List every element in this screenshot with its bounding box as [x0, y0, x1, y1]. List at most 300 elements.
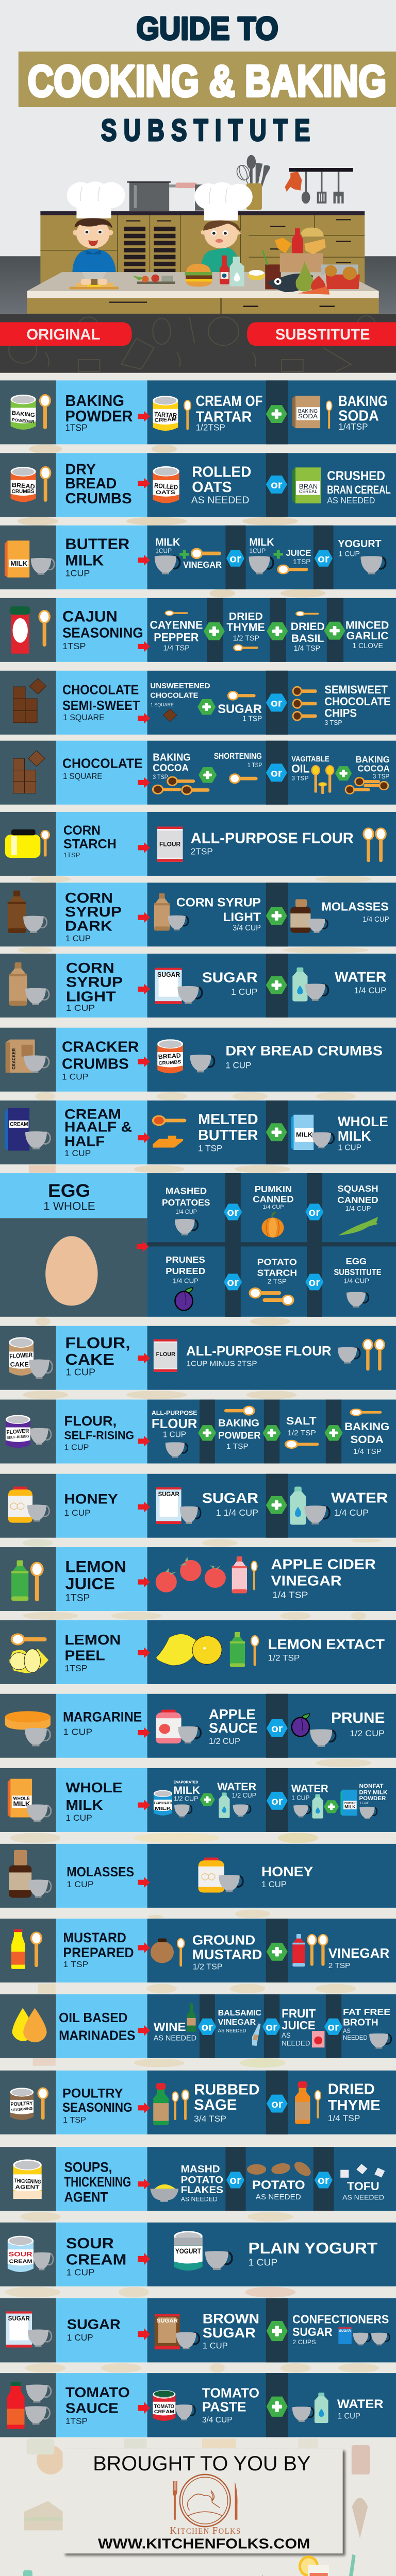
or — [305, 1204, 323, 1220]
original name: CHOCOLATE — [62, 683, 139, 698]
original icon — [10, 2087, 48, 2120]
substitute: nonfat dry milk powder: POWDER — [359, 1794, 386, 1802]
substitute: brown sugar: 1 CUP — [203, 2341, 228, 2351]
logo: kitchen folks: KITCHEN FOLKS — [170, 2526, 240, 2536]
original name: SOUPS, — [64, 2159, 112, 2175]
original name: MUSTARD — [63, 1930, 126, 1945]
substitute: rolled oats: AS NEEDED — [191, 495, 249, 506]
substitute: evaporated milk: 1/2 CUP — [174, 1795, 199, 1802]
substitute: evaporated milk: EVAPORATED — [154, 1801, 172, 1805]
substitute: brown sugar: SUGAR — [157, 2318, 178, 2324]
substitute: mashed potato flakes: AS NEEDED — [181, 2196, 218, 2203]
row: cajun seasoning — [0, 598, 396, 662]
utensil holder — [235, 155, 270, 210]
egg name — [43, 1180, 95, 1213]
arrow — [138, 2402, 150, 2414]
original name: POWDER — [65, 408, 133, 425]
original name: SYRUP — [66, 975, 123, 991]
or: or — [318, 2174, 329, 2187]
substitute: milk and juice: JUICE — [286, 548, 311, 558]
substitute: molasses: MOLASSES — [322, 901, 389, 913]
substitute: ground mustard: GROUND — [192, 1933, 255, 1947]
arrow — [138, 1132, 150, 1143]
row: lemon juice — [0, 1547, 396, 1611]
arrow — [138, 1056, 150, 1067]
substitute: all-purpose flour — [157, 826, 387, 862]
substitute: yogurt: 1 CUP — [338, 550, 360, 558]
row: molasses — [0, 1844, 396, 1908]
original name: 1 CUP — [67, 2333, 93, 2343]
row: tomato sauce — [0, 2373, 396, 2437]
or — [224, 1274, 242, 1290]
arrow — [138, 713, 150, 724]
row: poultry seasoning — [0, 2071, 396, 2134]
original name: 1TSP — [62, 641, 86, 651]
substitute: water: WATER — [291, 1782, 328, 1794]
label: original: ORIGINAL — [26, 326, 100, 343]
substitute: balsamic vinegar — [218, 2008, 261, 2046]
arrow — [138, 641, 150, 652]
substitute: baking soda: SODA — [350, 1433, 384, 1446]
substitute: sugar: SUGAR — [158, 1490, 179, 1498]
substitute: squash canned: 1/4 CUP — [345, 1205, 371, 1212]
substitute: melted butter: 1 TSP — [198, 1144, 223, 1153]
substitute: fat free broth: AS — [343, 2028, 351, 2035]
substitute: cream of tartar: CREAM — [154, 417, 177, 423]
substitute: squash canned: CANNED — [337, 1195, 378, 1205]
or: or — [318, 552, 329, 565]
substitute: baking soda: BAKING — [298, 409, 318, 414]
plus — [324, 622, 345, 640]
or: or — [271, 479, 283, 491]
arrow — [138, 1647, 150, 1658]
substitute: shortening: 1 TSP — [248, 761, 262, 769]
substitute: cream of tartar: TARTAR — [154, 411, 177, 419]
original name — [66, 960, 123, 1013]
original name — [65, 536, 129, 578]
or — [266, 476, 287, 494]
substitute: fruit juice: NEEDED — [282, 2040, 310, 2047]
substitute: nonfat dry milk powder: 1 CUP — [359, 1801, 370, 1805]
or: or — [229, 552, 241, 565]
original name: DRY — [65, 462, 96, 478]
kitchen back cabinets — [40, 211, 365, 284]
substitute: semisweet chocolate chips — [292, 683, 391, 726]
or — [305, 1274, 323, 1290]
original icon: BREAD — [11, 481, 35, 490]
original icon: CREAM — [10, 1122, 28, 1128]
substitute: corn syrup light: LIGHT — [223, 911, 261, 924]
or — [262, 2019, 280, 2035]
substitute: confectioners sugar — [292, 2313, 390, 2346]
original name: HAALF & — [64, 1120, 132, 1136]
substitute: baking cocoa: BAKING — [153, 752, 191, 763]
substitute: pumpkin canned: CANNED — [253, 1194, 294, 1204]
section: rows 1 to 5 — [0, 380, 396, 735]
substitute: baking cocoa: COCOA — [153, 762, 189, 774]
substitute: water: 1/2 CUP — [232, 1791, 256, 1799]
substitute: balsamic vinegar: VINEGAR — [218, 2018, 256, 2027]
section: final rows and footer — [0, 2223, 396, 2576]
substitute: rubbed sage: 3/4 TSP — [194, 2114, 226, 2124]
arrow — [137, 1241, 148, 1252]
row: corn syrup dark — [0, 883, 396, 946]
label: substitute: SUBSTITUTE — [275, 326, 370, 343]
substitute: sugar — [156, 1487, 258, 1524]
or: or — [271, 1722, 283, 1735]
substitute: fat free broth: BROTH — [343, 2018, 378, 2028]
substitute: all-purpose flour: FLOUR — [159, 841, 180, 848]
original name: MILK — [65, 552, 104, 569]
substitute: egg substitute: 1/4 CUP — [343, 1277, 369, 1285]
substitute: dry bread crumbs — [157, 1039, 383, 1073]
or: or — [229, 2174, 241, 2187]
substitute: milk and vinegar — [155, 536, 222, 574]
substitute: lemon extract — [156, 1632, 385, 1667]
original name: THICKENING — [64, 2174, 131, 2190]
substitute: plain yogurt — [174, 2231, 378, 2270]
row: chocolate — [0, 741, 396, 805]
original name: 1 SQUARE — [63, 713, 105, 722]
substitute: salt — [285, 1415, 319, 1449]
credit heading: BROUGHT TO YOU BY — [93, 2452, 310, 2475]
substitute: milk and juice: MILK — [249, 536, 274, 548]
substitute: unsweetened chocolate: UNSWEETENED — [150, 682, 210, 690]
original name: SELF-RISING — [64, 1429, 134, 1442]
original name: CORN — [66, 960, 114, 976]
original name: LEMON — [64, 1632, 121, 1648]
substitute: sugar: 1 TSP — [242, 715, 262, 723]
plus — [266, 1496, 287, 1514]
substitute: crushed bran cereal: AS NEEDED — [327, 496, 375, 505]
original name — [62, 2087, 133, 2125]
substitute: apple cider vinegar — [156, 1556, 376, 1600]
substitute: dried thyme: DRIED — [328, 2081, 375, 2097]
credit box — [62, 2449, 345, 2555]
substitute: evaporated milk — [154, 1781, 200, 1817]
substitute: tofu — [340, 2164, 385, 2201]
original name: 1 CUP — [64, 1508, 91, 1518]
substitute: mashed potatoes — [162, 1186, 210, 1235]
substitute: water — [292, 968, 386, 1002]
substitute: fruit juice: FRUIT — [282, 2008, 316, 2021]
arrow — [138, 555, 150, 566]
substitute: plain yogurt: PLAIN YOGURT — [248, 2240, 378, 2257]
faint food texture in gaps — [23, 1165, 297, 1399]
original icon: FLOWER — [9, 1351, 33, 1360]
substitute: prunes pureed: PRUNES — [166, 1255, 205, 1265]
original name: CREAM — [64, 1106, 121, 1122]
substitute: sugar: SUGAR — [202, 970, 258, 986]
substitute: apple sauce — [156, 1706, 258, 1746]
header wall background — [0, 0, 396, 257]
original icon — [5, 1711, 51, 1747]
original name: 1 SQUARE — [63, 772, 102, 781]
substitute: milk and vinegar: 1CUP — [155, 547, 172, 554]
original icon: SELF-RISING — [6, 1434, 29, 1440]
row: egg — [0, 1173, 396, 1317]
substitute: prune — [292, 1710, 385, 1747]
substitute: nonfat dry milk powder: NONFAT — [359, 1782, 384, 1789]
original icon: SUGAR — [8, 2315, 30, 2322]
substitute: baking soda: SODA — [338, 408, 379, 424]
substitute: potato starch: 2 TSP — [268, 1278, 287, 1285]
original name: HONEY — [64, 1491, 118, 1506]
substitute: confectioners sugar: CONFECTIONERS — [292, 2313, 389, 2326]
original name — [63, 824, 117, 859]
faint food texture in gaps — [10, 1539, 382, 1843]
substitute: whole milk: MILK — [296, 1131, 312, 1138]
original name: PREPARED — [63, 1945, 134, 1960]
substitute: salt: 1/2 TSP — [287, 1429, 316, 1437]
substitute: all-purpose flour: ALL-PURPOSE FLOUR — [191, 830, 354, 846]
or — [266, 764, 287, 782]
substitute: baking cocoa: 3 TSP — [373, 773, 389, 780]
plus — [199, 767, 217, 783]
original icon: CRUMBS — [12, 489, 35, 495]
substitute: yogurt: YOGURT — [338, 538, 382, 550]
original name: MARINADES — [59, 2028, 136, 2043]
substitute: whole milk: MILK — [338, 1128, 371, 1144]
or — [198, 2019, 216, 2035]
original icon — [9, 1633, 48, 1673]
substitute: crushed bran cereal: BRAN — [299, 483, 318, 490]
original name — [66, 2234, 126, 2278]
arrow — [138, 1727, 150, 1738]
original name: 1 TSP — [63, 2115, 86, 2125]
original icon — [9, 962, 49, 1006]
original name: 1TSP — [65, 2416, 88, 2426]
substitute: rolled oats: OATS — [192, 479, 232, 496]
substitute: cream of tartar: TARTAR — [196, 409, 252, 425]
substitute: mashed potatoes: POTATOES — [162, 1198, 210, 1208]
substitute: water — [290, 1487, 388, 1524]
row: corn syrup light — [0, 954, 396, 1018]
original name: CRUMBS — [65, 490, 132, 507]
faint food texture in gaps — [18, 444, 326, 598]
substitute: ground mustard: MUSTARD — [192, 1947, 262, 1962]
plus — [204, 622, 225, 640]
substitute: dry bread crumbs: CRUMBS — [158, 1059, 182, 1066]
substitute: apple sauce: SAUCE — [209, 1720, 258, 1736]
original icon — [8, 2236, 53, 2272]
original name: 1 CUP — [63, 1727, 92, 1737]
substitute: vegetable oil: OIL — [291, 762, 310, 775]
original name: DARK — [65, 918, 112, 934]
row: oil based marinades — [0, 1994, 396, 2058]
original name: FLOUR, — [65, 1334, 130, 1352]
plus — [267, 622, 288, 640]
row: baking powder — [0, 380, 396, 444]
substitute: plain yogurt: 1 CUP — [248, 2257, 277, 2268]
substitute: prunes pureed: PUREED — [166, 1266, 205, 1276]
section: rows 6 to 10 — [0, 741, 396, 1100]
substitute: potato: AS NEEDED — [256, 2193, 301, 2201]
substitute: milk and juice: 1CUP — [249, 547, 266, 554]
substitute: apple sauce: APPLE — [209, 1706, 256, 1722]
substitute: cream of tartar — [153, 393, 262, 433]
substitute: unsweetened chocolate: 1 SQUARE — [151, 702, 174, 708]
arrow — [138, 1501, 150, 1513]
original name: POULTRY — [62, 2087, 123, 2100]
substitute: vegetable oil: VAGITABLE — [291, 755, 329, 764]
substitute: ground mustard — [151, 1933, 262, 1972]
substitute: fruit juice: AS — [282, 2031, 291, 2040]
original icon — [5, 829, 50, 858]
substitute: baking soda — [344, 1409, 389, 1456]
plus — [200, 1793, 215, 1806]
original name: 1TSP — [65, 423, 87, 433]
substitute: water: 1 CUP — [291, 1794, 309, 1801]
substitute: dried thyme: 1/2 TSP — [233, 634, 259, 642]
substitute: corn syrup light: 3/4 CUP — [233, 923, 261, 933]
original name: 1TSP — [63, 851, 80, 859]
original name: CRACKER — [62, 1039, 139, 1055]
substitute: sugar — [218, 691, 262, 723]
original icon — [8, 1487, 50, 1523]
arrow — [138, 1353, 150, 1364]
substitute: all-purpose flour — [154, 1339, 385, 1372]
arrow — [138, 912, 150, 923]
substitute: confectioners sugar: SUGAR — [292, 2325, 333, 2338]
original name: CORN — [63, 824, 101, 838]
substitute: prune: 1/2 CUP — [350, 1728, 385, 1738]
original name: 1 CUP — [67, 1879, 94, 1889]
substitute: baking cocoa: 3 TSP — [153, 773, 168, 781]
or — [267, 2095, 288, 2113]
substitute: melted butter: MELTED — [198, 1111, 258, 1128]
row: cream half and half — [0, 1100, 396, 1164]
substitute: squash canned — [337, 1183, 378, 1235]
kitchen island — [27, 272, 379, 314]
substitute: lemon extract: LEMON EXTACT — [268, 1636, 385, 1652]
substitute: mashed potatoes: MASHED — [166, 1186, 207, 1196]
substitute: evaporated milk: MILK — [173, 1784, 200, 1797]
substitute: fat free broth: FAT FREE — [343, 2007, 390, 2017]
or — [267, 1719, 288, 1737]
substitute: all-purpose flour — [152, 1410, 197, 1458]
substitute: squash canned: SQUASH — [337, 1183, 378, 1194]
substitute: rolled oats — [153, 464, 251, 506]
substitute: rubbed sage: RUBBED — [194, 2081, 260, 2098]
original name: 1 CUP — [65, 1367, 95, 1378]
substitute: water: 1/4 CUP — [354, 986, 386, 995]
row: flour, self-rising — [0, 1400, 396, 1464]
original icon: POWEDER — [11, 417, 35, 425]
original name: 1CUP — [65, 568, 90, 578]
substitute: potato starch: STARCH — [257, 1268, 297, 1278]
original name: SAUCE — [65, 2400, 119, 2416]
or: or — [227, 1276, 239, 1289]
original name: BUTTER — [65, 536, 129, 553]
substitute: all-purpose flour: ALL-PURPOSE — [152, 1410, 197, 1416]
substitute: baking cocoa — [152, 752, 210, 795]
substitute: sugar: 1 CUP — [231, 987, 258, 997]
original name — [67, 2316, 121, 2343]
original icon — [11, 1560, 44, 1601]
original icon: FLOWER — [6, 1428, 29, 1435]
substitute: egg substitute — [334, 1256, 382, 1308]
substitute: milk and juice: 1TSP — [293, 558, 310, 566]
substitute: egg substitute: EGG — [346, 1256, 367, 1266]
substitute: honey — [198, 1858, 314, 1892]
original name — [65, 1557, 126, 1604]
or — [224, 1204, 242, 1220]
original name: CORN — [65, 890, 113, 906]
substitute: tomato paste: 3/4 CUP — [202, 2416, 233, 2425]
original name: 1 CUP — [65, 1813, 92, 1823]
substitute: dried thyme: 1/4 TSP — [328, 2114, 360, 2123]
substitute: plain yogurt: YOGURT — [175, 2247, 201, 2255]
substitute: baking soda: SODA — [298, 413, 318, 420]
original name: BREAD — [65, 476, 117, 492]
substitute: tomato paste — [153, 2386, 259, 2425]
original icon: MILK — [13, 1800, 30, 1807]
substitute: milk and vinegar: MILK — [155, 536, 180, 548]
arrow — [138, 2103, 150, 2113]
row: flour, cake — [0, 1326, 396, 1390]
hanging rack — [285, 168, 353, 204]
plus — [266, 405, 287, 423]
row: dry bread crumbs — [0, 453, 396, 517]
original name: HALF — [64, 1133, 105, 1149]
substitute: mashed potato flakes: POTATO — [181, 2175, 223, 2185]
title: guide to: GUIDE TO — [136, 11, 278, 46]
faint food texture in gaps — [20, 1910, 356, 2222]
original icon — [5, 1108, 50, 1150]
plus — [324, 1425, 343, 1440]
row: soups, thickening agent — [0, 2147, 396, 2211]
plus — [262, 1425, 281, 1440]
substitute: dried thyme — [295, 2081, 381, 2124]
substitute: baking soda: 1/4 TSP — [353, 1448, 382, 1456]
original name: WHOLE — [65, 1780, 123, 1796]
original name: LEMON — [65, 1557, 126, 1575]
original icon — [11, 1929, 42, 1969]
original name — [59, 2010, 136, 2043]
substitute: sugar: SUGAR — [157, 971, 180, 978]
dark pattern band — [0, 314, 396, 373]
arrow — [138, 777, 150, 788]
substitute: water: WATER — [217, 1781, 256, 1793]
substitute: cayenne pepper: 1/4 TSP — [163, 644, 190, 652]
plus — [324, 1800, 339, 1813]
substitute: milk and juice — [249, 536, 311, 574]
original name: 1 CUP — [64, 1443, 89, 1452]
or — [266, 693, 287, 711]
substitute: egg substitute: SUBSTITUTE — [334, 1267, 382, 1277]
row: lemon peel — [0, 1620, 396, 1684]
original name — [64, 1491, 118, 1518]
substitute: water — [291, 1782, 328, 1819]
substitute: vegetable oil — [291, 755, 334, 794]
substitute: apple sauce: 1/2 CUP — [209, 1737, 240, 1746]
plus — [266, 976, 287, 994]
original name: SEASONING — [62, 2101, 133, 2115]
substitute: rubbed sage: SAGE — [194, 2097, 237, 2113]
row: mustard prepared — [0, 1919, 396, 1982]
substitute: pumpkin canned — [253, 1184, 294, 1238]
substitute: minced garlic — [345, 619, 389, 650]
egg name: 1 WHOLE — [43, 1199, 95, 1213]
substitute: baking cocoa: BAKING — [356, 754, 390, 765]
original name: CREAM — [66, 2251, 126, 2268]
substitute: mashed potato flakes — [150, 2164, 223, 2203]
label: original — [0, 322, 132, 346]
row: sour cream — [0, 2223, 396, 2286]
row: corn starch — [0, 812, 396, 876]
substitute: corn syrup light: CORN SYRUP — [176, 896, 261, 909]
